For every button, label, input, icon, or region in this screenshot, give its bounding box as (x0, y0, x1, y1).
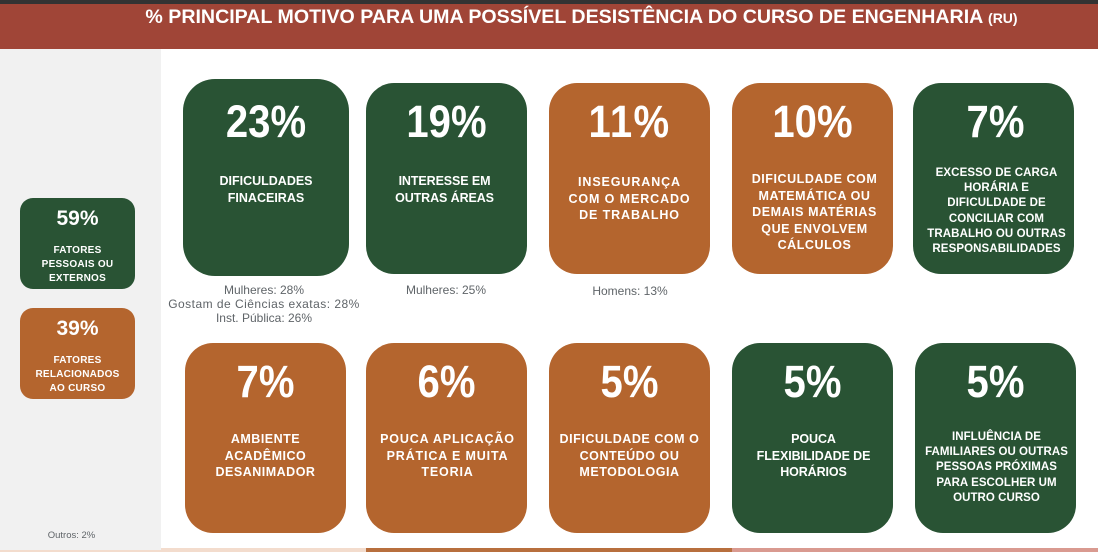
card: 5% family influence: INFLUÊNCIA DE (952, 431, 1041, 443)
card: 6% little practice: PRÁTICA E MUITA (387, 448, 508, 462)
card: 5% schedule flexibility: 5% (784, 356, 841, 407)
card: 6% little practice: TEORIA (421, 465, 474, 479)
card: 7% workload: HORÁRIA E (964, 182, 1029, 194)
card: 59% personal factors: PESSOAIS OU (42, 259, 113, 270)
note: card 1 segments: Gostam de Ciências exatas: 28% (168, 297, 360, 311)
card: 7% academic environment: 7% (237, 356, 294, 407)
card: 7% workload: EXCESSO DE CARGA (936, 167, 1057, 179)
card: 7% workload: 7% (967, 96, 1024, 147)
card: 5% schedule flexibility: FLEXIBILIDADE DE (757, 448, 870, 462)
card: 10% math difficulty: DEMAIS MATÉRIAS (752, 205, 877, 219)
card: 11% job market: 11% (589, 96, 670, 147)
card: 10% math difficulty (732, 83, 893, 274)
card: 7% academic environment (185, 343, 346, 533)
card: 5% content difficulty: METODOLOGIA (579, 465, 680, 479)
card: 39% course factors: 39% (56, 317, 99, 340)
card: 23% financial difficulties (183, 79, 349, 276)
note: card 1 segments: Mulheres: 28% (224, 283, 304, 297)
card: 5% family influence: PESSOAS PRÓXIMAS (936, 461, 1057, 473)
card: 7% workload: TRABALHO OU OUTRAS (927, 228, 1066, 240)
bottom color strip (0, 548, 1098, 552)
card: 5% family influence: 5% (967, 356, 1024, 407)
card: 59% personal factors: FATORES (53, 245, 102, 256)
card: 19% other interests: INTERESSE EM (399, 174, 490, 188)
card: 7% workload (913, 83, 1074, 274)
title banner (0, 4, 1098, 49)
card: 7% academic environment: DESANIMADOR (216, 465, 315, 479)
card: 7% academic environment: ACADÊMICO (225, 448, 306, 462)
card: 5% content difficulty: CONTEÚDO OU (580, 448, 679, 462)
card: 10% math difficulty: DIFICULDADE COM (752, 172, 877, 186)
note: others: Outros: 2% (48, 530, 95, 541)
note: card 1 segments: Inst. Pública: 26% (216, 311, 312, 325)
panel: side summary (0, 49, 161, 550)
card: 23% financial difficulties: FINACEIRAS (228, 190, 304, 204)
card: 5% family influence (915, 343, 1076, 533)
card: 11% job market: COM O MERCADO (568, 192, 691, 206)
card: 23% financial difficulties: 23% (226, 96, 306, 147)
card: 5% family influence: PARA ESCOLHER UM (936, 477, 1057, 489)
card: 10% math difficulty: CÁLCULOS (778, 238, 851, 252)
card: 10% math difficulty: MATEMÁTICA OU (758, 188, 870, 202)
top dark strip (0, 0, 1098, 4)
card: 10% math difficulty: QUE ENVOLVEM (761, 222, 868, 236)
card: 10% math difficulty: 10% (772, 96, 853, 147)
card: 39% course factors: AO CURSO (50, 383, 105, 394)
card: 11% job market (549, 83, 710, 274)
card: 5% content difficulty: DIFICULDADE COM O (560, 432, 699, 446)
card: 7% workload: CONCILIAR COM (949, 213, 1044, 225)
card: 59% personal factors: EXTERNOS (49, 273, 106, 284)
card: 11% job market: DE TRABALHO (579, 208, 680, 222)
note: card 1 segments (168, 283, 360, 325)
card: 19% other interests: 19% (406, 96, 487, 147)
card: 5% content difficulty: 5% (601, 356, 658, 407)
card: 5% schedule flexibility (732, 343, 893, 533)
card: 59% personal factors: 59% (56, 207, 99, 230)
card: 39% course factors: RELACIONADOS (35, 369, 120, 380)
card: 6% little practice (366, 343, 527, 533)
title banner: % PRINCIPAL MOTIVO PARA UMA POSSÍVEL DESISTÊNCIA DO CURSO DE ENGENHARIA (RU) (145, 6, 1018, 28)
card: 5% schedule flexibility: HORÁRIOS (780, 465, 847, 479)
card: 7% workload: DIFICULDADE DE (947, 197, 1046, 209)
card: 39% course factors (20, 308, 135, 399)
card: 7% academic environment: AMBIENTE (231, 432, 300, 446)
card: 5% schedule flexibility: POUCA (791, 432, 836, 446)
card: 6% little practice: 6% (418, 356, 475, 407)
card: 6% little practice: POUCA APLICAÇÃO (380, 432, 515, 446)
note: card 3 segment: Homens: 13% (592, 284, 668, 298)
card: 5% family influence: FAMILIARES OU OUTRAS (925, 446, 1068, 458)
card: 7% workload: RESPONSABILIDADES (932, 243, 1061, 255)
card: 39% course factors: FATORES (53, 355, 102, 366)
card: 19% other interests: OUTRAS ÁREAS (395, 190, 494, 204)
card: 11% job market: INSEGURANÇA (578, 175, 681, 189)
card: 19% other interests (366, 83, 527, 274)
note: card 2 segment: Mulheres: 25% (406, 283, 486, 297)
card: 23% financial difficulties: DIFICULDADES (219, 174, 313, 188)
card: 5% content difficulty (549, 343, 710, 533)
card: 59% personal factors (20, 198, 135, 289)
card: 5% family influence: OUTRO CURSO (953, 492, 1040, 504)
